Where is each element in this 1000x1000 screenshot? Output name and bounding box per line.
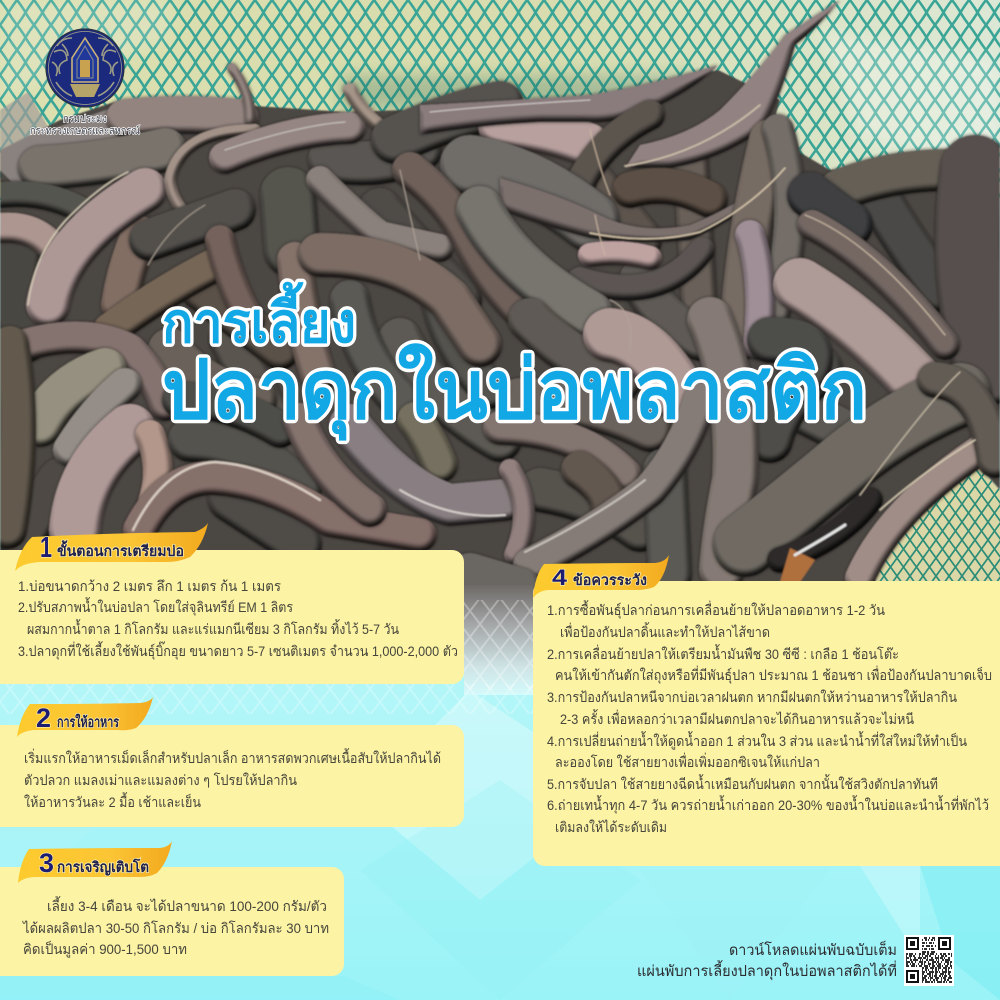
footer: download text: แผ่นพับการเลี้ยงปลาดุกในบ่อพลาสติกได้ที่ bbox=[637, 960, 897, 981]
ribbon 2: การให้อาหาร bbox=[57, 713, 119, 731]
fade: photo edge fading into cyan bbox=[0, 585, 533, 714]
title: การเลี้ยง bbox=[162, 282, 356, 354]
photo: catfish pile bbox=[0, 0, 1000, 600]
QR code bbox=[904, 935, 954, 986]
panel 4: cautions bbox=[533, 555, 1000, 866]
ribbon 4: ข้อควรระวัง bbox=[573, 572, 647, 589]
panel 2 text bbox=[24, 748, 441, 810]
footer: download text bbox=[637, 940, 897, 981]
ribbon 1 bbox=[15, 523, 208, 571]
panel 2 text: เริ่มแรกให้อาหารเม็ดเล็กสำหรับปลาเล็ก อาหารสดพวกเศษเนื้อสับให้ปลากินได้ bbox=[24, 748, 441, 766]
ribbon 1: ขั้นตอนการเตรียมบ่อ bbox=[57, 540, 184, 560]
ribbon 4: 4 bbox=[552, 565, 568, 590]
panel 4 text: 5.การจับปลา ใช้สายยางฉีดน้ำเหมือนกับฝนตก จากนั้นใช้สวิงตักปลาทันที bbox=[547, 774, 938, 792]
panel 4 text bbox=[547, 600, 992, 835]
ribbon 4 bbox=[533, 555, 669, 598]
title bbox=[162, 282, 867, 441]
panel 3 text: คิดเป็นมูลค่า 900-1,500 บาท bbox=[23, 940, 187, 958]
ribbon 3 bbox=[18, 841, 172, 883]
panel 4 text: ละอองโดย ใช้สายยางเพื่อเพิ่มออกซิเจนให้แก่ปลา bbox=[555, 753, 820, 770]
ribbon 2: 2 bbox=[36, 703, 51, 733]
panel 3 text bbox=[22, 896, 329, 958]
panel 4 text: 2-3 ครั้ง เพื่อหลอกว่าเวลามีฝนตกปลาจะได้กินอาหารแล้วจะไม่หนี bbox=[560, 709, 914, 727]
panel 3: growth bbox=[0, 841, 344, 976]
footer: download text: ดาวน์โหลดแผ่นพับฉบับเต็ม bbox=[729, 940, 897, 959]
title: ปลาดุกในบ่อพลาสติก bbox=[162, 343, 867, 441]
ribbon 3: การเจริญเติบโต bbox=[57, 858, 149, 876]
logo: Department of Fisheries seal bbox=[46, 29, 124, 107]
logo caption bbox=[30, 114, 140, 137]
panel 1 text: 1.บ่อขนาดกว้าง 2 เมตร ลึก 1 เมตร ก้น 1 เมตร bbox=[18, 578, 281, 594]
panel 2 text: ให้อาหารวันละ 2 มื้อ เช้าและเย็น bbox=[24, 792, 201, 810]
logo caption: กรมประมง bbox=[63, 114, 107, 125]
panel 4 text: เติมลงให้ได้ระดับเดิม bbox=[555, 819, 667, 835]
panel 4 text: 1.การซื้อพันธุ์ปลาก่อนการเคลื่อนย้ายให้ปลาอดอาหาร 1-2 วัน bbox=[547, 600, 885, 619]
panel 1 text: ผสมกากน้ำตาล 1 กิโลกรัม และแร่แมกนีเซียม 3 กิโลกรัม ทิ้งไว้ 5-7 วัน bbox=[27, 619, 399, 637]
panel 3 text: เลี้ยง 3-4 เดือน จะได้ปลาขนาด 100-200 กรัม/ตัว bbox=[47, 896, 327, 914]
panel 1 text bbox=[18, 578, 458, 660]
panel 4 text: เพื่อป้องกันปลาดิ้นและทำให้ปลาไส้ขาด bbox=[560, 622, 770, 640]
ribbon 1: 1 bbox=[40, 532, 52, 564]
panel 3 text: ได้ผลผลิตปลา 30-50 กิโลกรัม / บ่อ กิโลกรัมละ 30 บาท bbox=[22, 920, 329, 936]
panel 4 text: 4.การเปลี่ยนถ่ายน้ำให้ดูดน้ำออก 1 ส่วนใน 3 ส่วน และนำน้ำที่ใส่ใหม่ให้ทำเป็น bbox=[547, 731, 967, 750]
panel 4 text: 2.การเคลื่อนย้ายปลาให้เตรียมน้ำมันพืช 30 ซีซี : เกลือ 1 ช้อนโต๊ะ bbox=[547, 644, 899, 662]
panel 1 text: 2.ปรับสภาพน้ำในบ่อปลา โดยใส่จุลินทรีย์ EM 1 ลิตร bbox=[18, 597, 293, 616]
panel 2: feeding bbox=[0, 697, 464, 827]
photo: green net background bbox=[0, 0, 1000, 582]
ribbon 3: 3 bbox=[39, 848, 54, 878]
logo caption: กระทรวงเกษตรและสหกรณ์ bbox=[30, 125, 140, 137]
panel 4 text: 3.การป้องกันปลาหนีจากบ่อเวลาฝนตก หากมีฝนตกให้หว่านอาหารให้ปลากิน bbox=[547, 689, 957, 705]
panel 2 text: ตัวปลวก แมลงเม่าและแมลงต่าง ๆ โปรยให้ปลากิน bbox=[24, 772, 297, 788]
panel 1: pond preparation bbox=[0, 523, 464, 684]
highlights bbox=[28, 100, 975, 555]
ribbon 2 bbox=[17, 697, 153, 737]
panel 1 text: 3.ปลาดุกที่ใช้เลี้ยงใช้พันธุ์บิ๊กอุย ขนาดยาว 5-7 เซนติเมตร จำนวน 1,000-2,000 ตัว bbox=[18, 641, 458, 660]
